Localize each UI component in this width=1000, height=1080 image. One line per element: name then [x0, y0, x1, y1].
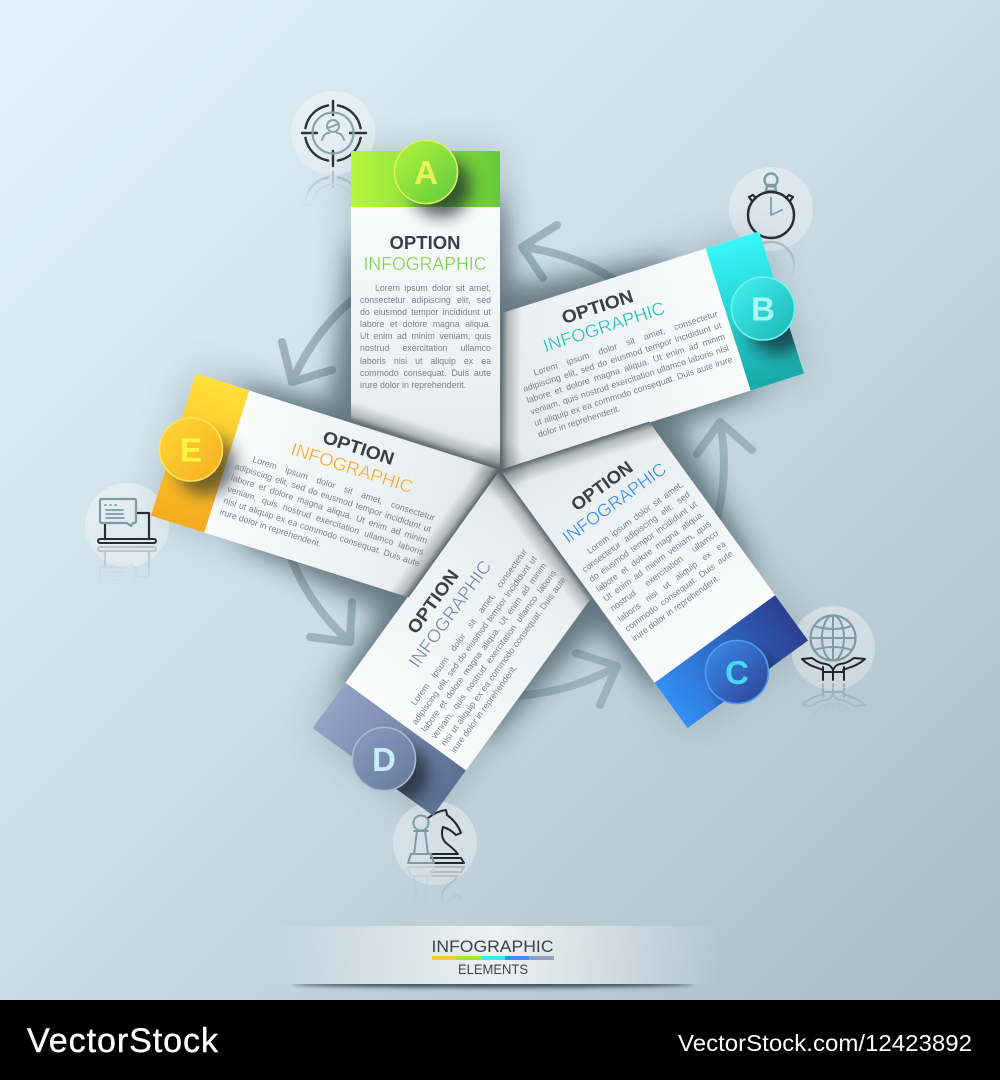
card B body — [455, 232, 804, 470]
card D text: nisi ut aliquip ex ea commodo consequat. Duis aute — [439, 575, 568, 748]
card C badge — [706, 640, 768, 704]
card C text: consectetur adipiscing elit, sed — [580, 489, 692, 574]
card A badge — [394, 140, 458, 204]
card E badge: E — [180, 432, 202, 468]
card B text: adipiscing elit, sed do eiusmod tempor incididunt ut — [522, 320, 723, 394]
arrow: E to D — [288, 550, 352, 642]
card B text — [503, 263, 740, 448]
card A badge shadow — [411, 157, 471, 217]
card D text: OPTION — [403, 566, 463, 637]
icon: laptop with chat bubble — [85, 483, 169, 576]
card A text: commodo consequat. Duis aute — [360, 368, 491, 378]
card D badge — [352, 728, 416, 790]
card E text — [216, 404, 451, 588]
card A text: Lorem ipsum dolor sit amet, — [375, 283, 491, 293]
card B text: INFOGRAPHIC — [541, 298, 667, 356]
icon: stopwatch — [729, 167, 813, 271]
card A text: labore et dolore magna aliqua. — [360, 319, 491, 329]
card E text: OPTION — [320, 427, 397, 469]
card A header — [351, 151, 500, 207]
banner title: INFOGRAPHIC — [432, 937, 554, 956]
card B header — [706, 232, 804, 390]
footer logo: VectorStock — [27, 1022, 219, 1060]
card E text: irure dolor in reprehenderit. — [218, 507, 322, 549]
card A text — [360, 233, 491, 398]
card C header — [655, 595, 808, 728]
card A text: irure dolor in reprehenderit. — [360, 380, 466, 390]
colour bar — [432, 956, 554, 960]
card C text — [543, 439, 746, 650]
card E header — [151, 374, 249, 533]
panel: card B — [500, 232, 804, 470]
card C text: commodo consequat. Duis aute — [623, 548, 735, 633]
card D text: Lorem ipsum dolor sit amet, consectetur — [409, 547, 529, 707]
card D body — [312, 470, 621, 816]
arrow: D to C — [505, 653, 617, 705]
panel: card E — [151, 374, 500, 612]
icon: target with person — [291, 91, 375, 200]
banner: infographic elements — [270, 926, 720, 988]
card B text: labore et dolore magna aliqua. Ut enim ad minim — [525, 332, 726, 405]
card C badge shadow — [722, 657, 782, 717]
card A text: OPTION — [390, 233, 460, 253]
card C text: do eiusmod tempor incididunt ut — [587, 499, 699, 584]
card C text: Lorem ipsum dolor sit amet, — [585, 480, 685, 556]
card E text: labore et dolore magna aliqua. Ut enim ad minim — [230, 473, 429, 546]
card D text: adipiscing elit, sed do eiusmod tempor incididunt ut — [410, 554, 539, 727]
card C text: OPTION — [567, 457, 637, 515]
footer bar — [0, 1000, 1000, 1080]
arrow: B to A — [522, 225, 632, 292]
card E text: adipiscing elit, sed do eiusmod tempor incididunt ut — [233, 461, 432, 534]
card B badge shadow — [737, 327, 799, 365]
card C text: Ut enim ad minim veniam, quis — [601, 519, 713, 604]
soft card shadows — [151, 151, 808, 816]
card A body — [351, 151, 500, 470]
card E text: veniam, quis nostrud exercitation ullamco laboris — [226, 484, 425, 557]
card D text: INFOGRAPHIC — [405, 557, 495, 671]
card C text: irure dolor in reprehenderit. — [630, 572, 721, 643]
card D badge shadow — [396, 734, 438, 807]
card B text: ut aliquip ex ea commodo consequat. Duis aute irure — [533, 355, 734, 428]
card B text: OPTION — [559, 286, 636, 328]
card D text: labore et dolore magna aliqua. Ut enim ad minim — [419, 561, 549, 734]
card B badge — [732, 277, 794, 340]
panel: card A — [351, 140, 500, 470]
card C text: laboris nisi ut aliquip ex ea — [616, 538, 727, 623]
card D badge: D — [372, 741, 396, 778]
card D text — [360, 518, 585, 760]
card E text: Lorem ipsum dolor sit amet, consectetur — [251, 454, 436, 523]
footer url: VectorStock.com/12423892 — [678, 1030, 972, 1056]
card E badge — [160, 418, 222, 481]
card A badge: A — [414, 154, 438, 191]
card B text: dolor in reprehenderit. — [537, 404, 622, 440]
card C text: INFOGRAPHIC — [559, 459, 670, 547]
card C text: nostrud exercitation ullamco — [608, 528, 720, 614]
cycle arrows — [282, 225, 752, 705]
card A text: consectetur adipiscing elit, sed — [360, 295, 491, 305]
card A text: INFOGRAPHIC — [364, 254, 486, 274]
panel: card D — [312, 470, 621, 816]
card A text: Ut enim ad minim veniam, quis — [360, 331, 491, 341]
card D text: irure dolor in reprehenderit. — [449, 663, 519, 755]
card B text: Lorem ipsum dolor sit amet, consectetur — [532, 309, 719, 378]
card E badge shadow — [176, 435, 236, 495]
card C badge: C — [725, 654, 749, 691]
panel: card C — [500, 422, 808, 728]
banner subtitle: ELEMENTS — [458, 961, 528, 977]
card D text: veniam, quis nostrud exercitation ullamco laboris — [429, 568, 558, 741]
card E text: nisi ut aliquip ex ea commodo consequat. Duis aute — [222, 496, 421, 569]
card C body — [500, 382, 808, 728]
card E body — [151, 374, 500, 612]
icon: globe in hands — [792, 606, 875, 707]
card C text: labore et dolore magna aliqua. — [594, 509, 706, 594]
arrow: A to E — [282, 292, 362, 382]
card B badge: B — [751, 290, 775, 328]
card D header — [312, 683, 466, 816]
card A text: do eiusmod tempor incididunt ut — [360, 307, 491, 317]
card A text: nostrud exercitation ullamco — [360, 343, 491, 353]
arrow: C to B — [697, 422, 752, 535]
card B text: veniam, quis nostrud exercitation ullamco laboris nisi — [529, 343, 730, 417]
icon: chess pawn and knight — [393, 802, 477, 896]
card E text: INFOGRAPHIC — [289, 439, 415, 497]
card A text: laboris nisi ut aliquip ex ea — [360, 356, 491, 366]
